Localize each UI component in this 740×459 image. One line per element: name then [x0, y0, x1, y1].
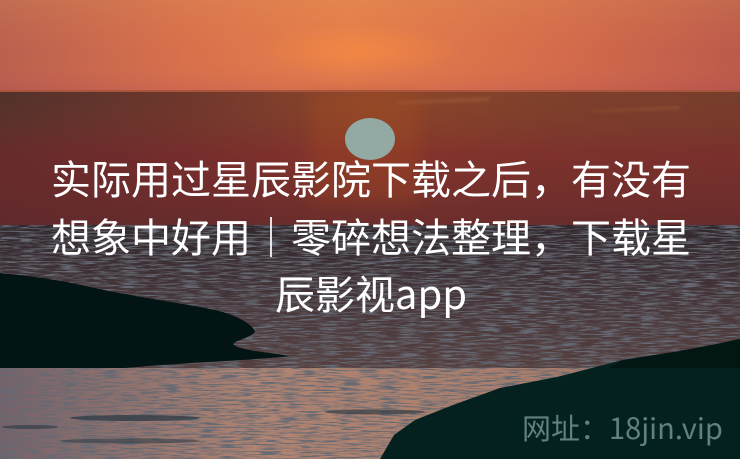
title: 想象中好用｜零碎想法整理，下载星	[51, 206, 691, 264]
bright lower water	[0, 368, 740, 459]
watermark: 网址：18jin.vip	[522, 406, 723, 448]
title: 辰影视app	[275, 263, 467, 321]
left island	[0, 273, 290, 368]
sun	[345, 118, 395, 160]
darkened upper sea with sun reflection	[0, 90, 740, 226]
sky	[0, 0, 740, 92]
dark water band	[0, 225, 740, 368]
right headland	[380, 339, 740, 459]
title	[51, 148, 691, 321]
title: 实际用过星辰影院下载之后，有没有	[51, 148, 691, 206]
